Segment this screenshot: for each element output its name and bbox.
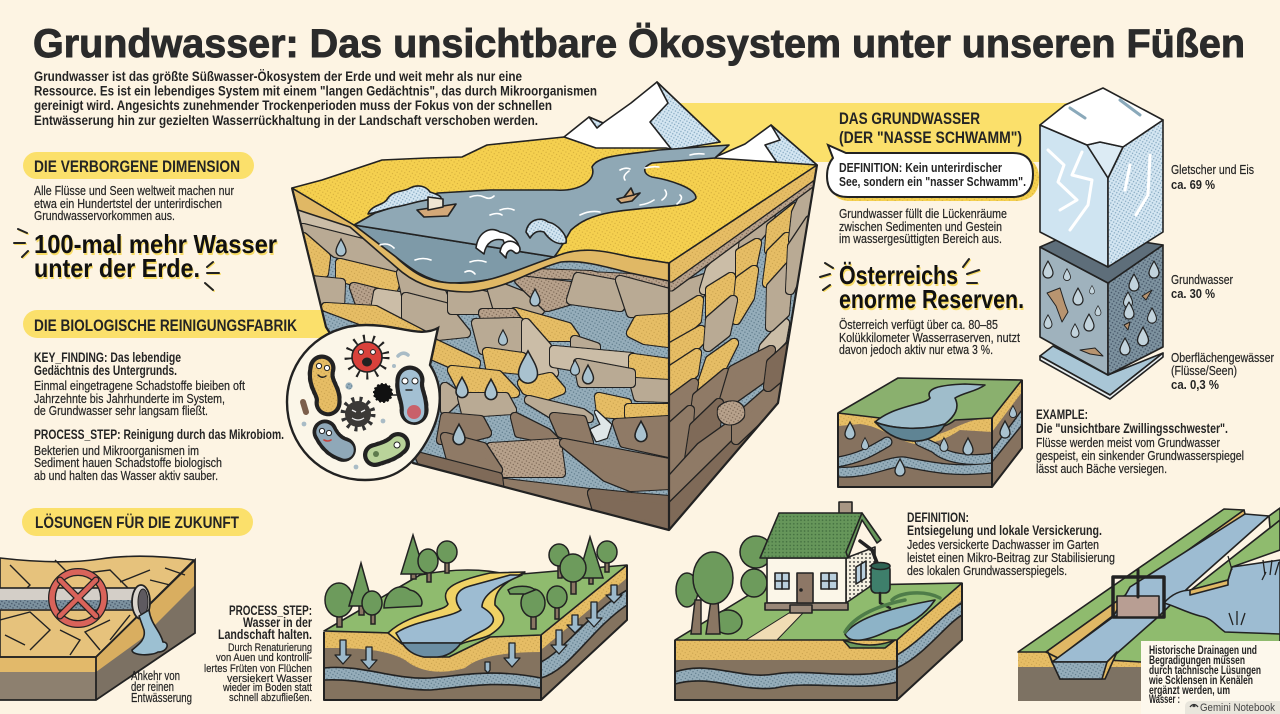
process step text: Wasser in der Landschaft: von Auen und kontrolli- [216,652,312,664]
prohibition sign [52,572,104,624]
key finding text: Jahrzehnte bis Jahrhunderte im System, [34,392,225,406]
yellow bacterium [316,363,330,403]
chart labels [1171,163,1274,392]
definition text: Entsiegelung: des lokalen Grundwasserspiegels. [907,564,1067,578]
text box: historische Drainagen [1141,641,1280,714]
key finding text: Einmal eingetragene Schadstoffe bieiben oft [34,379,245,393]
water ripples [380,154,704,274]
chart labels: Gletscher und Eis [1171,163,1254,177]
illustration: renatured river landscape block [324,535,627,700]
Lückenräume text: zwischen Sedimenten und Gestein [839,220,1002,234]
heading: DAS GRUNDWASSER [839,109,980,128]
intro text block: gereinigt wird. Angesichts zunehmender Trockenperioden muss der Fokus von der schnellen [34,97,552,113]
pipe [0,585,150,619]
illustration: canal with sluice gate and pond [1018,508,1280,701]
process step text: Wasser in der Landschaft: schnell abzufließen. [229,692,312,704]
key finding text: de Grundwasser sehr langsam fließt. [34,404,208,418]
process step text: Wasser in der Landschaft: lertes Früten von Flüchen [204,663,312,675]
house [760,502,881,613]
definition speech bubble [827,145,1039,201]
key number callout [14,229,277,290]
small river cross section [838,378,1022,487]
yellow land surface [292,137,817,263]
mountains [564,82,817,170]
process step text: Wasser in der Landschaft: versiekert Wasser [227,673,312,685]
definition text: Entsiegelung: Entsiegelung und lokale Versickerung. [907,523,1102,538]
main cutaway block of ground and water [292,82,817,530]
Österreich body text [839,318,1020,357]
red virus [348,338,386,376]
process step text: Wasser in der Landschaft: Wasser in der [243,615,313,630]
example text [1036,407,1244,476]
process step text [34,427,284,483]
sluice gate [1113,570,1164,617]
body text: Hundertstel: Grundwasservorkommen aus. [34,209,175,223]
heading pill: Reinigungsfabrik [23,310,340,338]
Österreich callout [820,259,1024,314]
chart labels: ca. 30 % [1171,286,1215,301]
process step text: Bekterien und Mikroorganismen im [34,444,199,458]
key number callout: 100-mal mehr Wasser [34,229,277,259]
right face of block with stones and water veins [669,165,817,530]
process step text: Wasser in der Landschaft [204,603,313,704]
definition speech bubble: DEFINITION: Kein unterirdischer [839,160,1002,175]
heading pill: Lösungen für die Zukunft: LÖSUNGEN FÜR DIE ZUKUNFT [35,513,239,532]
panel: das Grundwasser [820,109,1039,357]
blue-grey bacterium [319,428,345,450]
Österreich body text: davon jedoch aktiv nur etwa 3 %. [839,343,993,357]
surface water plate [1040,346,1163,399]
process step text: ab und halten das Wasser aktiv sauber. [34,469,218,483]
groundwater cube [1040,237,1163,375]
lake cross section [354,225,554,283]
intro text block [34,68,597,128]
heading [839,109,1022,147]
example text: Die "unsichtbare Zwillingsschwester". [1036,421,1228,436]
key finding text: Gedächtnis des Untergrunds. [34,363,177,378]
definition text: Entsiegelung: leistet einen Mikro-Beitrag zur Stabilisierung [907,551,1115,565]
heading: (DER "NASSE SCHWAMM") [839,128,1022,147]
Österreich body text: Kolükkilometer Wasserraserven, nutzt [839,331,1020,345]
black germs [343,384,392,429]
panel: die verborgene Dimension [14,152,277,290]
body text: Hundertstel: Alle Flüsse und Seen weltweit machen nur [34,184,234,198]
water stream from pipe [132,610,167,655]
caption: Abkehr: Ahkehr von [131,669,180,683]
definition text: Entsiegelung: DEFINITION: [907,510,969,525]
rain barrel [871,562,890,608]
water drops in rock [336,239,647,445]
foam waves [368,186,566,258]
text box: historische Drainagen: ergänzt werden, um [1149,685,1230,697]
title: Grundwasser: Das unsichtbare Ökosystem unter unseren Füßen [33,21,1245,66]
example text: EXAMPLE: [1036,407,1088,422]
water distribution column chart [1040,88,1274,399]
process step text: PROCESS_STEP: Reinigung durch das Mikrobiom. [34,427,284,442]
text box: historische Drainagen: Wasser : [1149,694,1180,706]
trees [325,535,617,629]
heading pill: verborgene Dimension: DIE VERBORGENE DIMENSION [34,157,240,176]
blue microbe [391,378,421,419]
sand layer under the surface [292,188,669,292]
groundwater arrows [335,585,622,673]
chart labels: ca. 0,3 % [1171,377,1219,392]
process step text: Wasser in der Landschaft: PROCESS_STEP: [229,603,312,618]
caption: Abkehr: der reinen [131,680,174,694]
caption: Abkehr [131,669,192,705]
chart labels: ca. 69 % [1171,177,1215,192]
ice cube [1040,88,1163,267]
panel: biologische Reinigungsfabrik [23,310,340,483]
heading pill: verborgene Dimension [23,152,254,179]
body text: Hundertstel: etwa ein Hundertstel der unterirdischen [34,197,222,211]
small particles [302,353,408,469]
block outline [292,165,817,530]
green bacterium [373,442,400,457]
body text: Hundertstel [34,184,234,223]
Lückenräume text [839,207,1007,246]
illustration: cracked soil and blocked drainage pipe [0,556,195,700]
heading band: das Grundwasser [678,103,1072,162]
definition text: Entsiegelung: Jedes versickerte Dachwasser im Garten [907,538,1099,552]
rain garden [843,593,940,648]
example text: gespeist, ein sinkender Grundwasserspiegel [1036,449,1244,463]
caption: Abkehr: Entwässerung [131,691,192,705]
example text: Flüsse werden meist vom Grundwasser [1036,436,1220,450]
definition text: Entsiegelung [907,510,1115,578]
heading pill: Lösungen für die Zukunft [22,508,253,536]
process step text: Sediment hauen Schadstoffe biologisch [34,456,222,470]
trees [676,536,772,634]
key finding text: KEY_FINDING: Das lebendige [34,350,181,365]
heading pill: Reinigungsfabrik: DIE BIOLOGISCHE REINIGUNGSFABRIK [34,316,298,335]
process step text: Wasser in der Landschaft: Durch Renaturierung [228,642,312,654]
key finding text [34,350,245,418]
process step text: Wasser in der Landschaft: Landschaft halten. [218,627,312,642]
text box: historische Drainagen: Begradigungen müssen [1149,655,1245,667]
key number callout: unter der Erde. [34,253,200,283]
reeds [1228,556,1279,625]
intro text block: Entwässerung hin zur gezielten Wasserrückhaltung in der Landschaft verschoben werden. [34,112,538,128]
chart labels: (Flüsse/Seen) [1171,364,1237,378]
front face of block with stones and water veins [292,188,669,530]
chart labels: Grundwasser [1171,273,1233,287]
intro text block: Ressource. Es ist ein lebendiges System mit einem "langen Gedächtnis", das durch Mikroorganismen [34,82,597,98]
Lückenräume text: Grundwasser füllt die Lückenräume [839,207,1007,221]
illustration: house with rain water infiltration [675,502,962,700]
definition speech bubble: See, sondern ein "nasser Schwamm". [839,174,1026,189]
intro text block: Grundwasser ist das größte Süßwasser-Ökosystem der Erde und weit mehr als nur eine [34,68,522,84]
Österreich callout: Österreichs [839,260,958,290]
example text: lässt auch Bäche versiegen. [1036,462,1167,476]
boats [417,188,640,217]
process step text: Wasser in der Landschaft: wieder im Boden statt [222,682,312,694]
Lückenräume text: im wassergesüttigten Bereich aus. [839,232,1002,246]
microbe magnifier bubble [287,325,440,480]
lake and winding river [354,145,729,257]
Österreich callout: enorme Reserven. [839,284,1024,314]
Österreich body text: Österreich verfügt über ca. 80–85 [839,318,998,332]
